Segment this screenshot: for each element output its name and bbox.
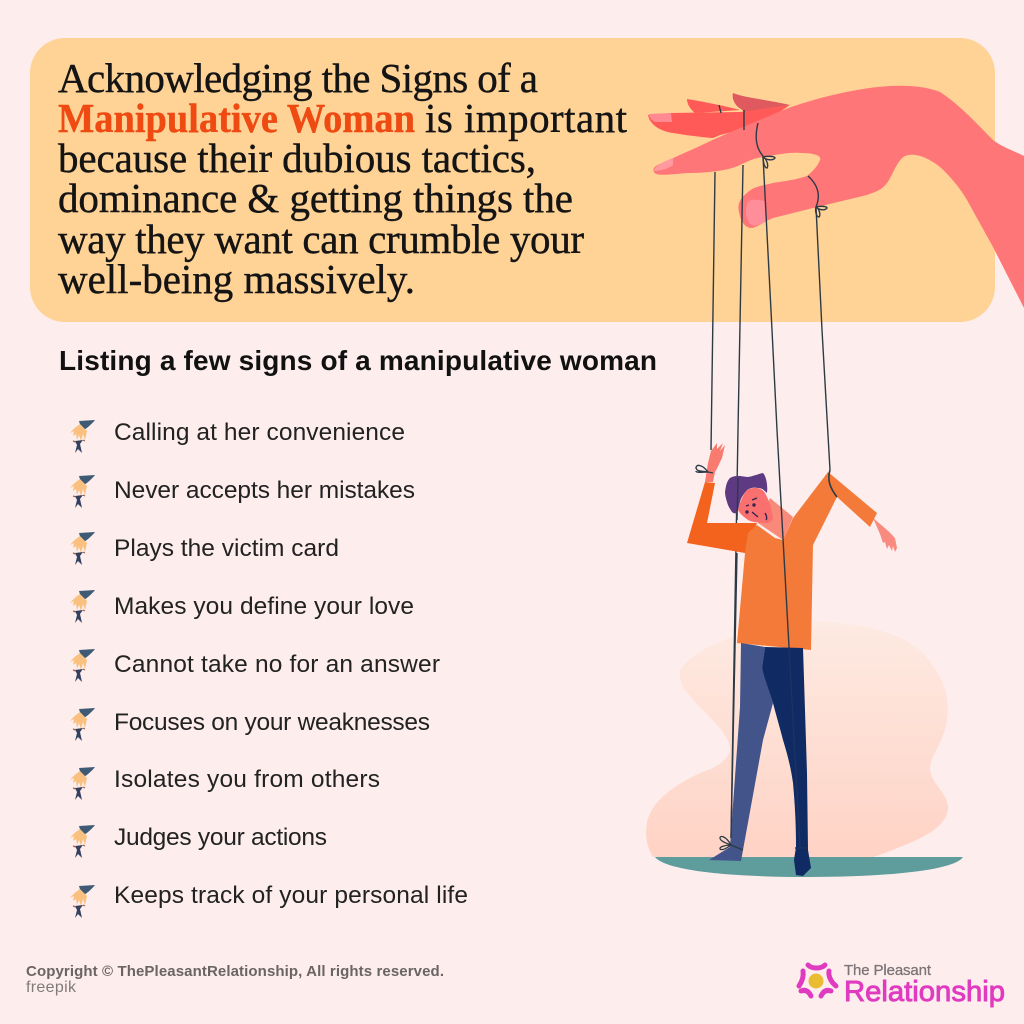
item 7: Isolates you from others	[114, 766, 380, 793]
logo icon	[799, 965, 836, 996]
right leg	[762, 647, 811, 876]
item 9	[70, 882, 468, 918]
left leg	[709, 643, 773, 861]
logo: Relationship	[844, 976, 1005, 1008]
face	[738, 488, 773, 523]
strings lower	[696, 430, 837, 850]
left sleeve	[687, 482, 757, 553]
neck	[758, 498, 793, 540]
copyright: Copyright © ThePleasantRelationship, All rights reserved.	[26, 963, 444, 980]
heading text: well-being massively.	[58, 256, 415, 302]
item 9: Keeps track of your personal life	[114, 882, 468, 909]
hand	[648, 86, 1024, 308]
logo	[799, 962, 1005, 1008]
item 8: Judges your actions	[114, 824, 327, 851]
item 4: Makes you define your love	[114, 593, 414, 620]
logo text: The Pleasant	[844, 962, 932, 979]
strings upper	[711, 105, 830, 838]
item 8	[70, 824, 327, 858]
sign list	[70, 419, 468, 918]
item 3	[70, 532, 339, 565]
header panel	[30, 38, 995, 322]
heading text: Manipulative Woman	[58, 95, 415, 141]
item 5: Cannot take no for an answer	[114, 651, 440, 678]
heading text: Acknowledging the Signs of a	[58, 55, 538, 101]
item 3: Plays the victim card	[114, 535, 339, 562]
heading text: dominance & getting things the	[58, 175, 573, 221]
ground ellipse	[655, 857, 963, 877]
hair	[725, 473, 767, 513]
heading text: is important	[425, 95, 628, 141]
copyright: freepik	[26, 979, 77, 996]
item 1: Calling at her convenience	[114, 419, 405, 446]
item 6: Focuses on your weaknesses	[114, 709, 430, 736]
face details	[746, 498, 767, 520]
right hand	[873, 518, 897, 552]
copyright	[26, 963, 444, 996]
puppet figure	[687, 443, 897, 876]
heading text: because their dubious tactics,	[58, 135, 536, 181]
item 1	[70, 419, 405, 453]
left hand	[705, 443, 725, 482]
torso and right sleeve	[737, 472, 877, 650]
heading text: way they want can crumble your	[58, 216, 584, 262]
item 2: Never accepts her mistakes	[114, 477, 415, 504]
background blob	[646, 622, 948, 857]
heading text	[58, 55, 628, 302]
subheading: Listing a few signs of a manipulative woman	[59, 345, 657, 376]
item 7	[70, 766, 380, 800]
